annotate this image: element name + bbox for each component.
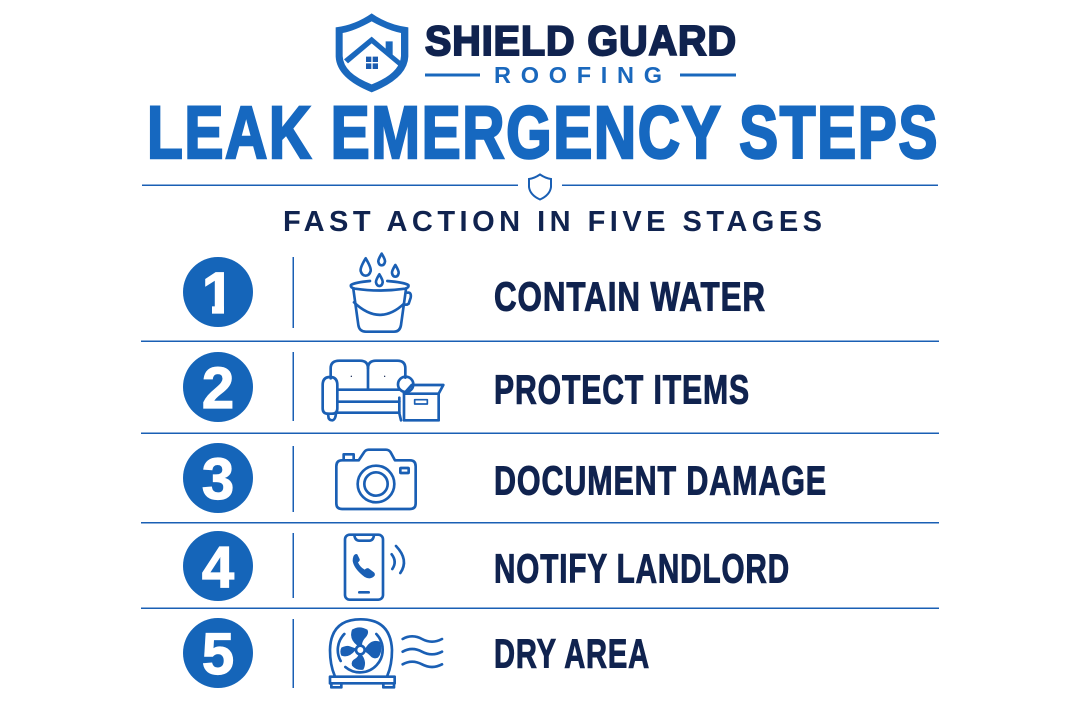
step 5: dry area: [183, 618, 650, 688]
row dividers: [141, 340, 939, 609]
number badge 4: 4: [202, 535, 234, 600]
icon: sofa and box: [323, 361, 443, 420]
number badge 5: [183, 618, 253, 688]
logo wordmark: SHIELD GUARD: [425, 17, 737, 64]
label: PROTECT ITEMS: [494, 366, 750, 412]
step 3: document damage: [183, 443, 827, 513]
title divider with shield: [142, 174, 938, 200]
number badge 2: [183, 352, 253, 422]
icon: phone with signal: [345, 535, 404, 600]
number badge 3: [183, 443, 253, 513]
step 2: protect items: [183, 352, 750, 422]
label: NOTIFY LANDLORD: [494, 546, 790, 592]
step 4: notify landlord: [183, 531, 790, 601]
icon: camera: [336, 450, 416, 509]
number badge 3: 3: [202, 447, 234, 512]
number badge 2: 2: [202, 356, 234, 421]
step 1: contain water: [183, 254, 766, 332]
subtitle: FAST ACTION IN FIVE STAGES: [283, 206, 822, 238]
label: DOCUMENT DAMAGE: [494, 458, 827, 504]
icon: shield with house: [336, 13, 408, 92]
number badge 1: [183, 257, 253, 327]
label: CONTAIN WATER: [494, 274, 766, 320]
number badge 4: [183, 531, 253, 601]
icon: fan with air waves: [330, 619, 442, 687]
label: DRY AREA: [494, 630, 650, 676]
number badge 5: 5: [202, 622, 234, 687]
logo: [336, 13, 737, 92]
icon: bucket with drops: [351, 254, 411, 332]
number badge 1: 1: [202, 261, 234, 326]
logo subtitle: ROOFING: [494, 62, 662, 88]
